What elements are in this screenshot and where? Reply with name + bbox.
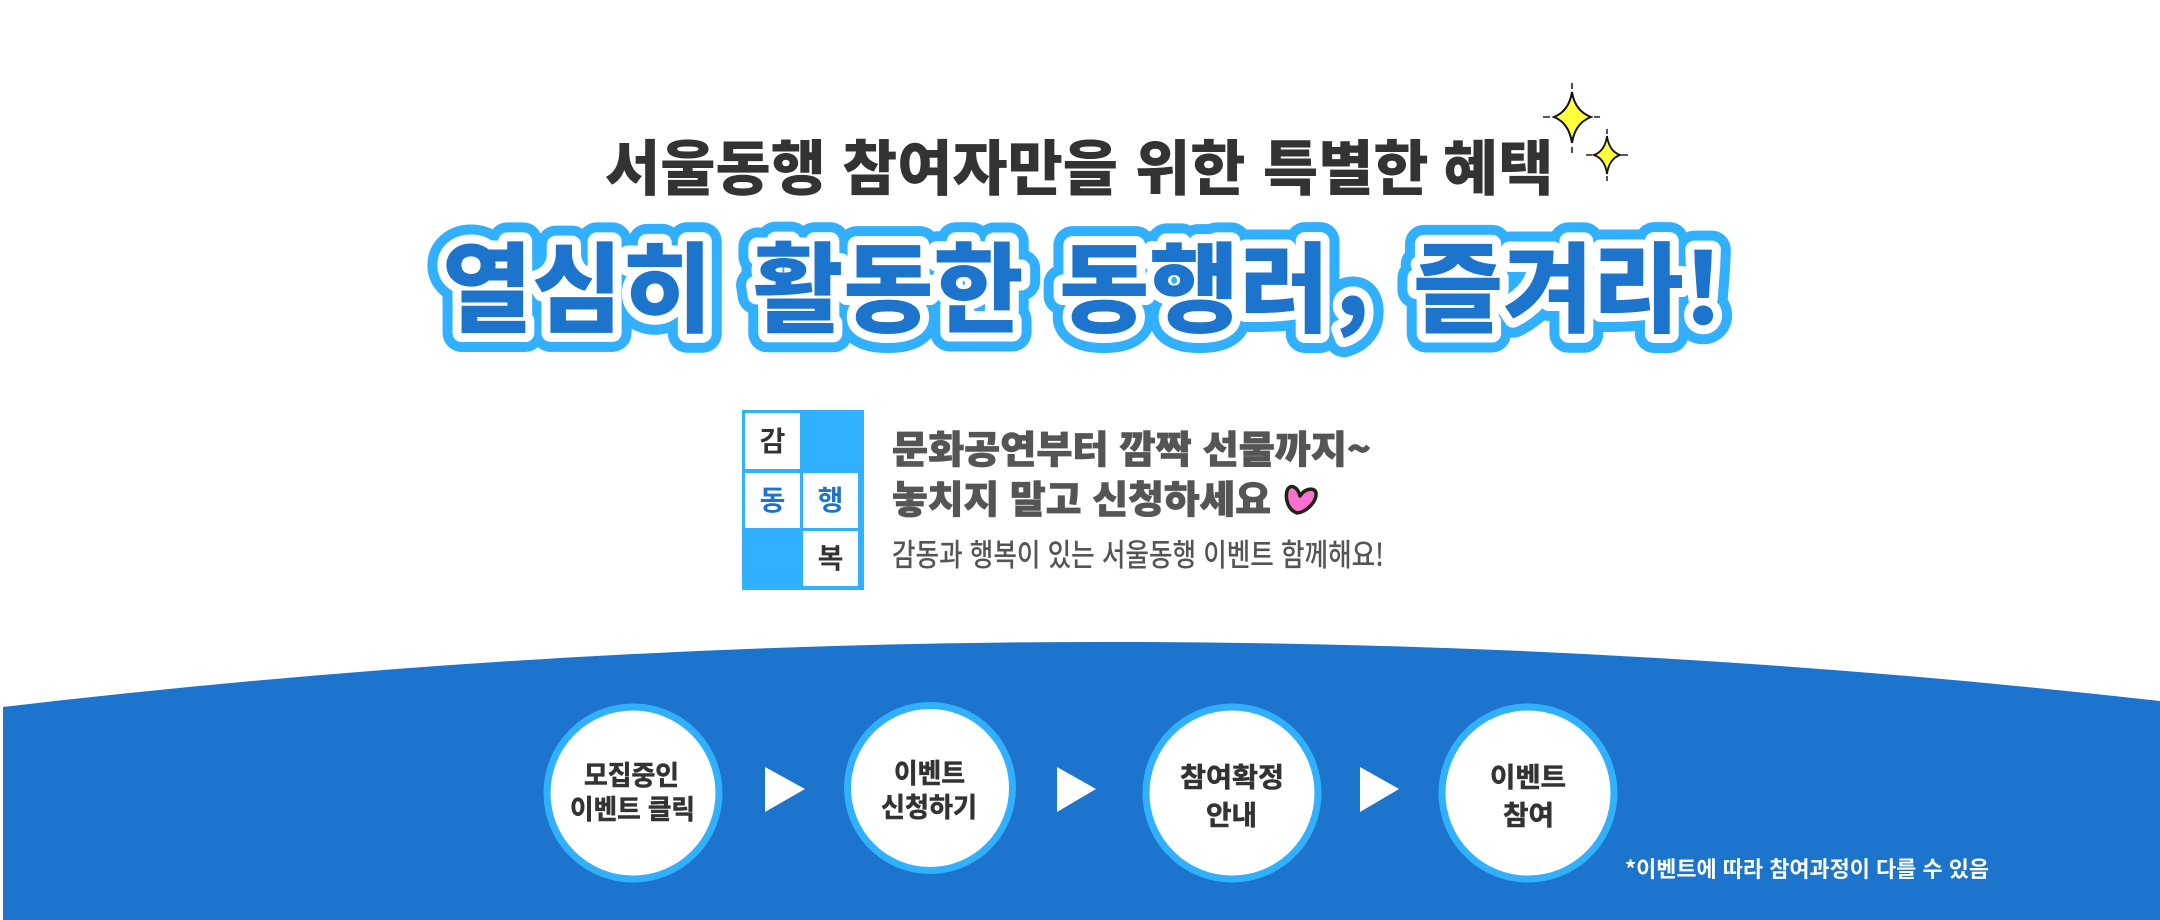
step 3 circle: 안내: [1206, 794, 1257, 833]
panel: word grid: [742, 410, 864, 590]
headline: 열심히: [442, 211, 712, 353]
headline: 즐겨라!: [1413, 211, 1723, 353]
grid cell: 감: [745, 413, 800, 469]
grid cell: 행: [803, 473, 858, 528]
headline: [442, 201, 1723, 353]
headline: 열심히: [442, 211, 712, 353]
headline: 활동한: [753, 211, 1023, 353]
title: 혜택: [1443, 121, 1553, 208]
panel: blue curved band: [3, 642, 2160, 920]
arrow 1: [765, 767, 805, 812]
icon: sparkles: [1543, 83, 1628, 181]
headline: 활동한: [753, 211, 1023, 353]
step 3 circle: 참여확정: [1180, 756, 1284, 795]
grid cell: 감: 감: [760, 420, 785, 460]
title: 참여자만을: [842, 121, 1118, 208]
headline: 동행러: [1059, 211, 1329, 353]
headline: ,: [1335, 201, 1370, 343]
headline: 동행러: [1059, 211, 1329, 353]
headline: 즐겨라!: [1413, 211, 1723, 353]
headline: 열심히: [442, 211, 712, 353]
grid cell: 동: [745, 473, 800, 528]
headline: 즐겨라!: [1413, 211, 1723, 353]
step 2 circle: [848, 706, 1012, 870]
arrow 3: [1360, 767, 1399, 812]
title: 특별한: [1263, 121, 1429, 208]
step 4 circle: 참여: [1503, 794, 1554, 833]
text block: handwritten line: 감동과 행복이 있는 서울동행 이벤트 함께해요!: [892, 530, 1384, 575]
grid cell: 복: [803, 531, 858, 586]
grid cell: 동: 동: [760, 479, 785, 519]
step 2 circle: 이벤트: [894, 752, 965, 791]
arrow 2: [1057, 767, 1096, 812]
title: 서울동행: [605, 121, 826, 208]
step 4 circle: [1442, 707, 1614, 879]
headline: 동행러: [1059, 211, 1329, 353]
text block: promo line 1: 문화공연부터 깜짝 선물까지~: [892, 419, 1371, 474]
grid cell: 행: 행: [818, 479, 843, 519]
step 1 circle: [547, 707, 719, 879]
step 1 circle: 모집중인: [584, 754, 679, 793]
step 3 circle: [1146, 707, 1318, 879]
step 1 circle: 이벤트 클릭: [570, 788, 695, 827]
footnote: *이벤트에 따라 참여과정이 다를 수 있음: [1625, 852, 1989, 884]
title: 위한: [1135, 121, 1245, 208]
headline: 활동한: [753, 211, 1023, 353]
text block: promo line 2: 놓치지 말고 신청하세요: [892, 469, 1271, 524]
step 4 circle: 이벤트: [1490, 756, 1566, 795]
step 2 circle: 신청하기: [881, 786, 977, 825]
icon: heart: [1286, 487, 1316, 513]
headline: ,: [1335, 201, 1370, 343]
headline: ,: [1335, 201, 1370, 343]
grid cell: 복: 복: [818, 537, 843, 577]
